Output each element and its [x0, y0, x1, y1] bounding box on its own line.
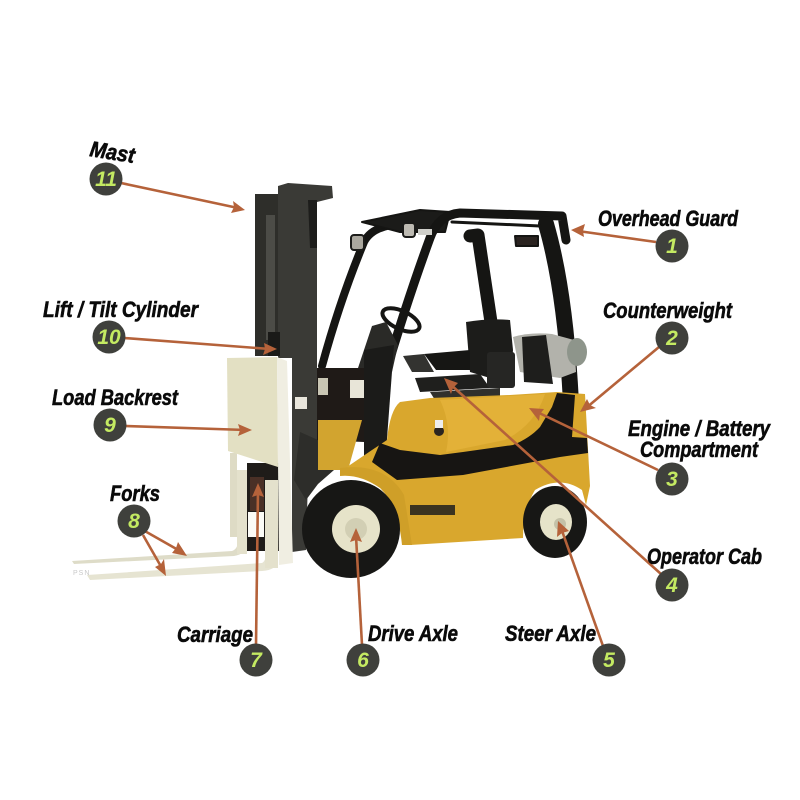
- label: load backrest: Load Backrest: [52, 385, 179, 410]
- operator seat: [403, 319, 515, 400]
- label: lift / tilt cylinder: Lift / Tilt Cylinder: [43, 297, 199, 322]
- arrow: forks: [143, 530, 187, 576]
- steer wheel: [523, 486, 587, 558]
- badge 2: [656, 322, 688, 354]
- badge 4: [656, 568, 688, 602]
- badge 8: 8: [128, 510, 140, 533]
- label: mast: Mast: [88, 136, 138, 168]
- label: overhead guard: Overhead Guard: [598, 206, 738, 231]
- badge 5: [592, 644, 626, 676]
- cab frame: [322, 210, 572, 430]
- arrow: engine compartment: [529, 408, 658, 470]
- arrow: load backrest: [125, 424, 252, 436]
- badge 7: 7: [250, 649, 263, 672]
- black body band: [372, 393, 588, 515]
- label: forks: Forks: [110, 481, 160, 506]
- label: engine / battery compartment: Engine / Battery: [628, 416, 771, 441]
- badge 10: 10: [97, 326, 121, 349]
- mast: [255, 183, 334, 552]
- badge 7: [240, 644, 272, 676]
- label: engine / battery compartment: Compartment: [640, 437, 759, 462]
- badge 10: [92, 320, 126, 354]
- drive wheel: [302, 467, 412, 578]
- steering wheel and column: [358, 303, 423, 372]
- label: operator cab: Operator Cab: [647, 544, 762, 569]
- badge 3: [656, 462, 688, 496]
- badge 9: [94, 408, 126, 442]
- badge 11: 11: [95, 168, 117, 191]
- arrow: mast: [121, 183, 245, 213]
- badge 11: [90, 162, 122, 196]
- load backrest: [227, 357, 293, 565]
- arrow: steer axle: [557, 521, 603, 646]
- label: drive axle: Drive Axle: [368, 621, 458, 646]
- arrow: drive axle: [350, 528, 362, 645]
- badge 5: 5: [603, 649, 615, 672]
- arrow: carriage: [252, 483, 264, 645]
- forks: PSN: [73, 570, 90, 577]
- yellow body: [347, 392, 590, 545]
- arrow: counterweight: [580, 347, 659, 412]
- label: steer axle: Steer Axle: [505, 621, 596, 646]
- badge 1: [656, 230, 688, 262]
- badge 2: 2: [665, 327, 678, 350]
- badge 6: [346, 644, 380, 676]
- forks: [72, 530, 278, 580]
- label: carriage: Carriage: [177, 622, 253, 647]
- badge 4: 4: [665, 574, 678, 597]
- arrow: lift tilt cylinder: [124, 338, 277, 355]
- dash panel: [317, 345, 394, 470]
- badge 9: 9: [104, 414, 116, 437]
- badge 8: [118, 504, 150, 538]
- LPG tank: [513, 333, 587, 384]
- arrow: overhead guard: [571, 224, 656, 242]
- arrows: [121, 183, 661, 646]
- badge 6: 6: [357, 649, 369, 672]
- label: counterweight: Counterweight: [603, 298, 733, 323]
- badge 1: 1: [666, 235, 678, 258]
- forklift illustration: [72, 183, 590, 580]
- badge 3: 3: [666, 468, 678, 491]
- arrow: operator cab: [444, 378, 661, 574]
- carriage: [230, 453, 280, 568]
- headlights: [351, 223, 432, 250]
